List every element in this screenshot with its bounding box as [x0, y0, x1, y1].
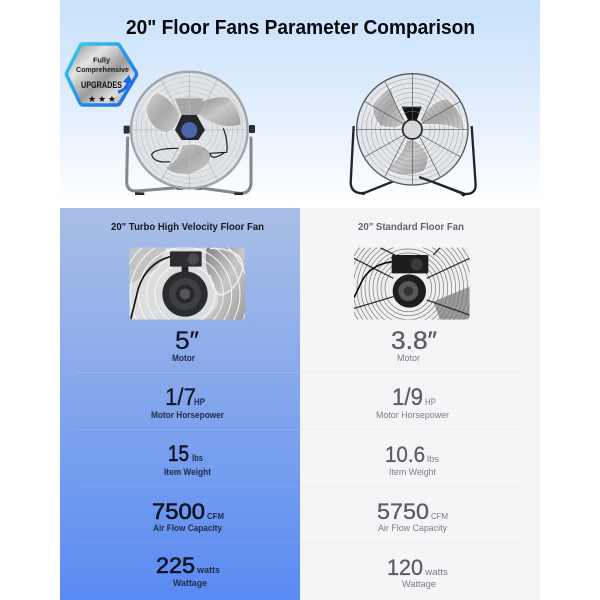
- stat: standard air flow: [377, 499, 448, 534]
- stat: standard wattage: [387, 555, 448, 590]
- stat: turbo motor: [172, 327, 199, 364]
- stat: turbo horsepower: HP: [194, 397, 205, 407]
- stat: turbo weight: Item Weight: [164, 467, 212, 478]
- stat: turbo horsepower: [151, 384, 224, 421]
- fan: turbo high velocity: [124, 71, 255, 195]
- heading: standard fan: 20" Standard Floor Fan: [358, 221, 464, 233]
- stat: turbo weight: lbs: [192, 453, 203, 463]
- heading: turbo fan: 20" Turbo High Velocity Floor Fan: [111, 221, 264, 233]
- stat: turbo air flow: 7500: [152, 499, 205, 524]
- stat: standard air flow: CFM: [431, 511, 448, 521]
- fan: standard floor fan: [351, 73, 476, 196]
- stat: standard weight: [385, 442, 440, 478]
- stat: turbo air flow: [152, 499, 224, 534]
- badge: fully comprehensive upgrades: Comprehensive: [76, 67, 129, 74]
- stat: turbo wattage: [156, 553, 220, 589]
- stat: turbo air flow: Air Flow Capacity: [153, 523, 223, 534]
- title: 20" Floor Fans Parameter Comparison: [126, 17, 475, 39]
- stat: standard horsepower: 1/9: [392, 384, 423, 411]
- motor photo: standard: [354, 248, 470, 320]
- stat: standard horsepower: HP: [425, 397, 436, 407]
- panel: turbo fan column: [60, 208, 300, 600]
- stat: standard wattage: watts: [424, 567, 448, 578]
- stat: turbo wattage: Wattage: [173, 578, 207, 589]
- badge: fully comprehensive upgrades: [66, 44, 136, 105]
- stat: standard motor: Motor: [397, 353, 420, 364]
- motor photo: turbo: [129, 248, 245, 320]
- stat: turbo horsepower: 1/7: [165, 384, 196, 411]
- stat: turbo wattage: watts: [196, 565, 220, 576]
- stat: standard wattage: 120: [387, 555, 423, 580]
- stat: standard weight: lbs: [427, 454, 440, 464]
- stat: turbo weight: 15: [168, 441, 189, 466]
- stat: turbo motor: Motor: [172, 353, 195, 364]
- stat: standard horsepower: [376, 384, 449, 421]
- stat: turbo wattage: 225: [156, 553, 195, 578]
- badge: fully comprehensive upgrades: ★★★: [88, 94, 116, 104]
- stat: standard horsepower: Motor Horsepower: [376, 410, 449, 421]
- stat: turbo weight: [164, 441, 212, 478]
- top header background: [60, 0, 540, 206]
- panel: standard fan column: [300, 208, 540, 600]
- stat: standard weight: 10.6: [385, 442, 425, 467]
- stat: standard air flow: 5750: [377, 499, 429, 524]
- stat: standard weight: Item Weight: [389, 467, 436, 478]
- stat: standard air flow: Air Flow Capacity: [378, 523, 447, 534]
- stat: standard wattage: Wattage: [402, 579, 436, 590]
- stat: turbo motor: 5″: [175, 327, 199, 355]
- stat: standard motor: 3.8″: [391, 327, 437, 355]
- badge: fully comprehensive upgrades: UPGRADES: [81, 80, 122, 91]
- stat: turbo horsepower: Motor Horsepower: [151, 410, 224, 421]
- stat: turbo air flow: CFM: [207, 511, 224, 521]
- badge: fully comprehensive upgrades: Fully: [93, 58, 110, 64]
